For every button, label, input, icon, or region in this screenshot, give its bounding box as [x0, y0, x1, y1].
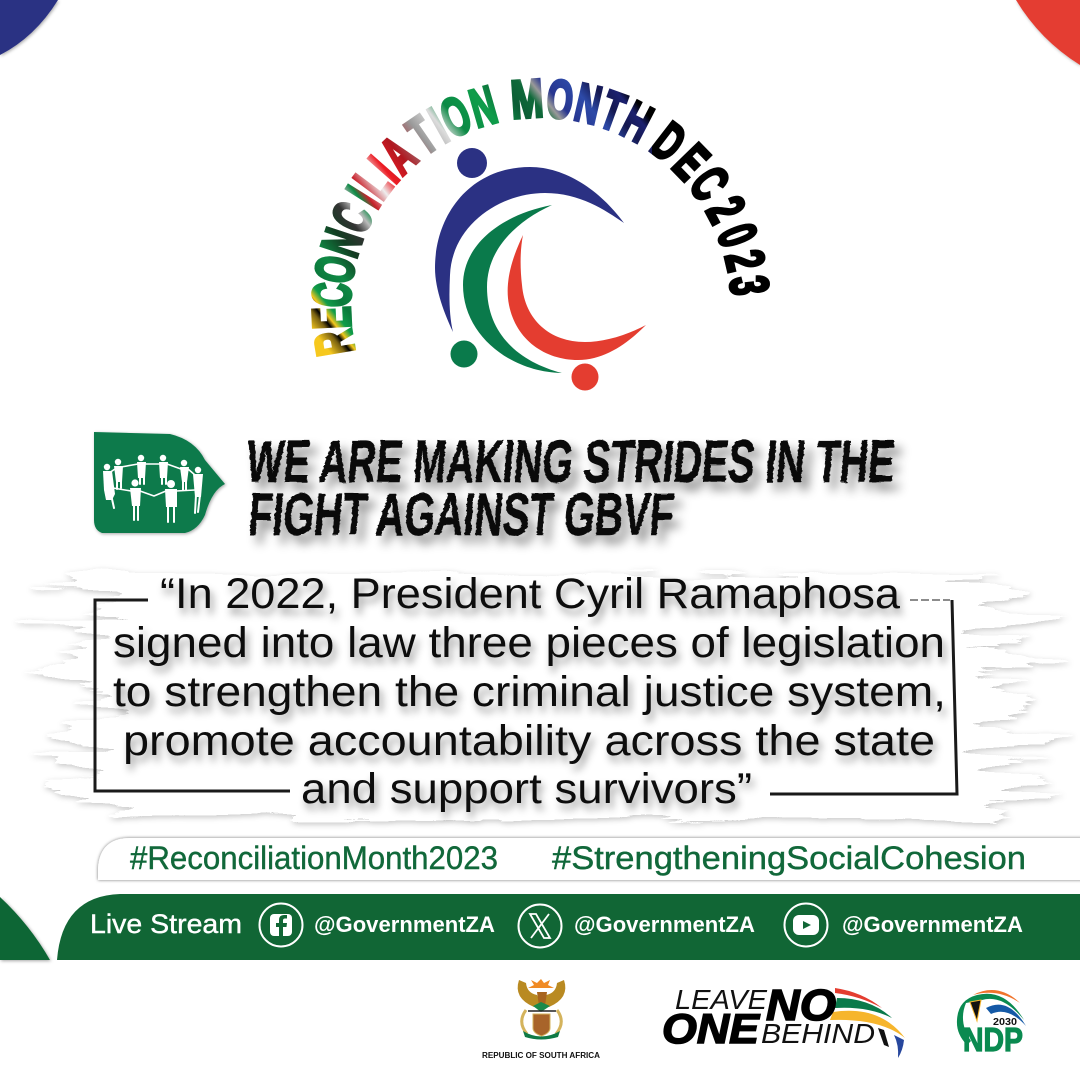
quote text: to strengthen the criminal justice system,: [113, 668, 946, 716]
sun: [528, 979, 554, 988]
logo green figure: [450, 205, 562, 373]
shield: [533, 1014, 550, 1036]
protea band: [533, 1002, 550, 1012]
logo blue figure: [435, 148, 624, 332]
logo: Leave No One Behind: NO: [766, 981, 836, 1030]
quote text: [113, 570, 946, 813]
blue band: [986, 1005, 1026, 1026]
hashtags: #StrengtheningSocialCohesion: [552, 840, 1026, 876]
curved title: Reconciliation Month Dec 2023: [311, 78, 770, 357]
logo red figure: [508, 235, 646, 390]
icon: youtube: [784, 904, 828, 946]
ribbon: [523, 1031, 560, 1040]
logo: NDP 2030: [957, 990, 1026, 1058]
icon: facebook: [260, 904, 302, 946]
black triangle: [970, 1000, 981, 1021]
quote frame bracket: [95, 600, 957, 794]
wordmark: LEAVE: [675, 984, 767, 1015]
quote text: signed into law three pieces of legislation: [113, 619, 945, 667]
logo: Leave No One Behind: ONE: [662, 1005, 761, 1052]
secretary bird: [537, 992, 547, 1006]
handle: youtube: @GovernmentZA: [842, 912, 1023, 937]
2030: 2030: [993, 1016, 1017, 1028]
icon: green tag with ring of children: [94, 432, 225, 533]
logo: reconciliation people: [435, 148, 646, 390]
flag stripes: [835, 988, 882, 1008]
NDP: NDP: [963, 1021, 1023, 1058]
corner: top right red: [1016, 0, 1080, 65]
heading: we are making strides: [244, 428, 898, 548]
icon: X: [518, 904, 562, 948]
caption: Republic of South Africa: REPUBLIC OF SOUTH AFRICA: [482, 1051, 600, 1060]
hashtags: [130, 840, 1026, 876]
heading: we are making strides: FIGHT AGAINST GBVF: [246, 481, 677, 548]
orange arc: [973, 990, 1020, 1003]
wheat oval: [522, 1010, 561, 1034]
quote text: promote accountability across the state: [123, 717, 935, 765]
handle: facebook: @GovernmentZA: [314, 912, 495, 937]
coat of arms emblem: [518, 979, 565, 1040]
corner: top left blue: [0, 0, 58, 55]
footer bar: live stream: [57, 894, 1080, 960]
quote text: “In 2022, President Cyril Ramaphosa: [160, 570, 900, 618]
green ring: [957, 994, 1024, 1045]
handle: X: @GovernmentZA: [574, 912, 755, 937]
hashtags: #ReconciliationMonth2023: [130, 840, 498, 876]
wings: [518, 980, 541, 1007]
logo: Leave No One Behind: [662, 981, 905, 1058]
logo: Leave No One Behind: BEHIND: [761, 1018, 875, 1049]
hashtag strip: [98, 838, 1080, 880]
panel: torn paper quote background: [70, 574, 1010, 820]
spear and kerrie: [528, 1010, 556, 1012]
corner: bottom left green: [0, 897, 50, 960]
live stream label: Live Stream: [90, 909, 242, 939]
quote text: and support survivors”: [301, 765, 752, 813]
